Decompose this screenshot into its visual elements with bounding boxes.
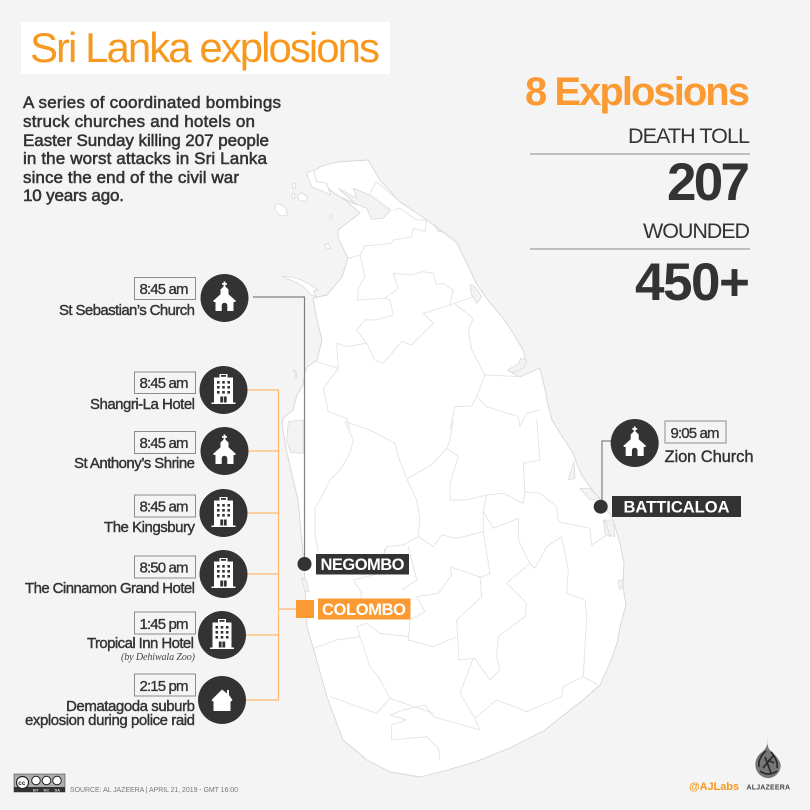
licence badge: SA — [54, 787, 60, 792]
intro text block: 10 years ago. — [23, 186, 124, 205]
entry: Tropical Inn Hotel: Tropical Inn Hotel — [87, 635, 194, 652]
licence badge: cc — [18, 780, 26, 787]
entry: The Cinnamon Grand Hotel: The Cinnamon Grand Hotel — [25, 580, 195, 597]
entry: St Anthony's Shrine: St Anthony’s Shrine — [74, 455, 195, 472]
entry: Shangri-La Hotel — [90, 366, 248, 414]
entry: Dematagoda suburb: explosion during police raid — [25, 712, 195, 729]
entry: St Sebastian's Church: St Sebastian’s Church — [59, 302, 195, 319]
entry: Zion Church — [611, 419, 754, 467]
entry: St Anthony's Shrine — [74, 427, 248, 475]
connector: Zion Church to Batticaloa — [602, 441, 612, 507]
wounded label: WOUNDED — [643, 219, 750, 243]
entry: The Cinnamon Grand Hotel: 8:50 am — [140, 560, 188, 576]
island outline — [282, 160, 626, 777]
intro text block: since the end of the civil war — [23, 168, 239, 187]
entry: Dematagoda suburb: 2:15 pm — [140, 678, 188, 695]
intro text block: in the worst attacks in Sri Lanka — [23, 149, 268, 168]
connector: St Sebastian's to Negombo — [253, 297, 304, 564]
entry: Tropical Inn Hotel: (by Dehiwala Zoo) — [121, 652, 196, 663]
entry: Shangri-La Hotel: Shangri-La Hotel — [90, 396, 195, 413]
entry: Dematagoda suburb — [25, 674, 246, 729]
entry: The Kingsbury — [104, 489, 248, 537]
source line: SOURCE: AL JAZEERA | APRIL 21, 2019 - GMT 16:00 — [70, 787, 238, 794]
entry: The Kingsbury: 8:45 am — [140, 498, 188, 516]
map of Sri Lanka — [275, 160, 626, 777]
logo: Al Jazeera — [746, 738, 790, 792]
heading: 8 explosions: 8 Explosions — [525, 70, 750, 114]
entry: Tropical Inn Hotel — [87, 611, 246, 663]
marker: Colombo: COLOMBO — [322, 601, 406, 619]
marker: Negombo — [298, 554, 409, 574]
wounded number: 450+ — [635, 253, 750, 312]
marker: Negombo: NEGOMBO — [320, 556, 405, 574]
entry: Zion Church: Zion Church — [664, 448, 754, 466]
title: Sri Lanka explosions — [30, 24, 380, 71]
entry: Shangri-La Hotel: 8:45 am — [140, 375, 188, 392]
marker: Colombo — [296, 598, 410, 620]
entry: St Sebastian's Church — [59, 274, 248, 322]
statistics panel — [525, 70, 750, 312]
intro text block — [23, 93, 281, 205]
marker: Batticaloa: BATTICALOA — [624, 498, 730, 516]
connector: Colombo attacks — [246, 390, 296, 700]
credit: AJLabs: @AJLabs — [689, 781, 739, 793]
offshore islands and lagoons — [275, 170, 540, 430]
licence badge: BY — [33, 787, 39, 792]
death toll number: 207 — [667, 153, 750, 212]
licence badge — [14, 774, 65, 792]
entry: Dematagoda suburb: Dematagoda suburb — [66, 698, 195, 715]
marker: Batticaloa — [594, 496, 741, 517]
licence badge: NC — [44, 787, 49, 792]
intro text block: A series of coordinated bombings — [23, 93, 281, 112]
entry: The Cinnamon Grand Hotel — [25, 550, 248, 598]
intro text block: struck churches and hotels on — [23, 112, 255, 131]
entry: Tropical Inn Hotel: 1:45 pm — [140, 616, 188, 633]
entry: St Anthony's Shrine: 8:45 am — [140, 435, 188, 452]
entry: St Sebastian's Church: 8:45 am — [140, 281, 188, 298]
logo: Al Jazeera: ALJAZEERA — [746, 784, 790, 792]
entry: Zion Church: 9:05 am — [670, 425, 720, 442]
icon: house — [198, 676, 246, 724]
entry: The Kingsbury: The Kingsbury — [104, 519, 196, 536]
intro text block: Easter Sunday killing 207 people — [23, 131, 269, 150]
death toll label: DEATH TOLL — [628, 124, 750, 148]
